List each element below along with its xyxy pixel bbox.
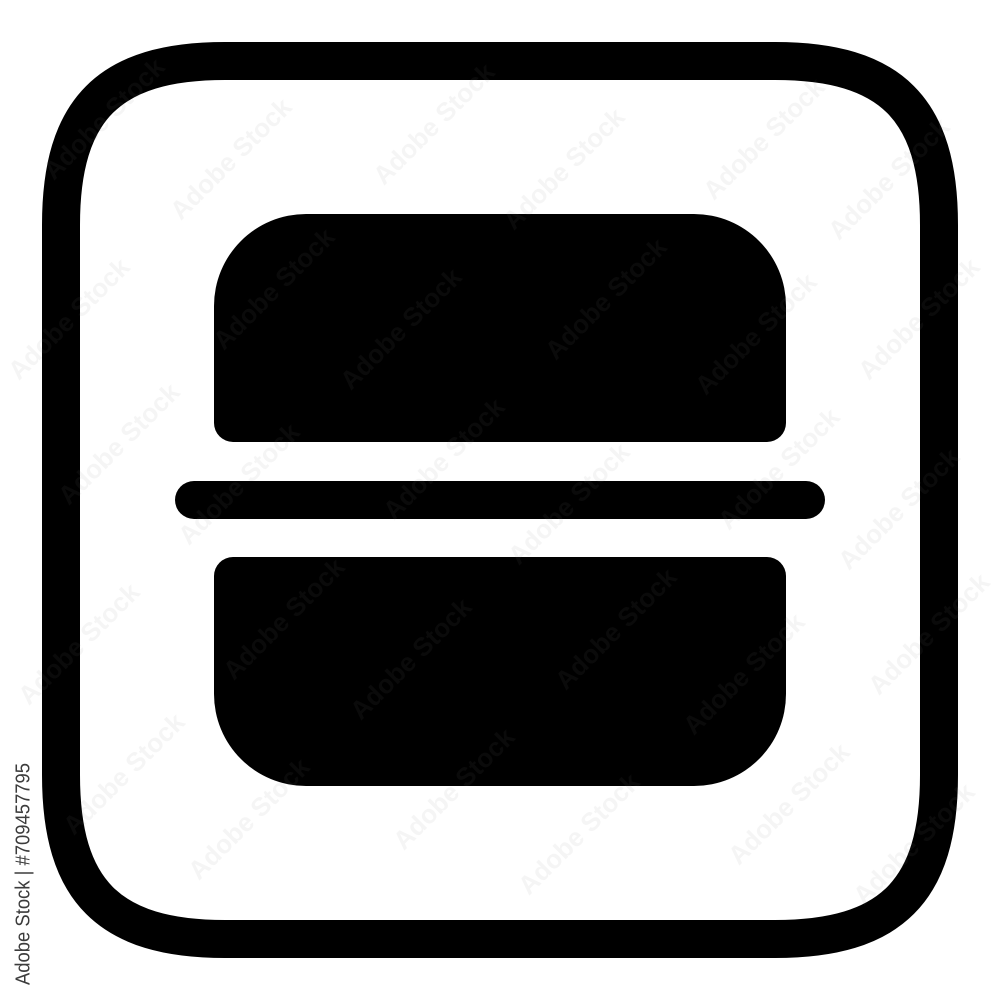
watermark pattern: Adobe Stock: [207, 221, 341, 355]
watermark pattern: Adobe Stock: [334, 261, 468, 395]
icon: bottom bun: [214, 557, 786, 786]
watermark pattern: Adobe Stock: [2, 251, 136, 385]
icon: middle patty line: [175, 481, 825, 519]
watermark pattern: Adobe Stock: [512, 766, 646, 900]
watermark pattern: Adobe Stock: [52, 376, 186, 510]
watermark pattern: Adobe Stock: [12, 576, 146, 710]
watermark pattern: Adobe Stock: [689, 266, 823, 400]
watermark pattern: Adobe Stock: [172, 416, 306, 550]
watermark pattern: Adobe Stock: [847, 776, 981, 910]
watermark pattern: Adobe Stock: [539, 231, 673, 365]
watermark pattern: Adobe Stock: [722, 736, 856, 870]
watermark pattern: Adobe Stock: [497, 101, 631, 235]
watermark pattern: Adobe Stock: [862, 566, 996, 700]
watermark pattern: Adobe Stock: [57, 706, 191, 840]
watermark pattern: Adobe Stock: [502, 436, 636, 570]
watermark pattern: Adobe Stock: [217, 551, 351, 685]
watermark pattern: Adobe Stock: [344, 591, 478, 725]
watermark pattern: Adobe Stock: [677, 606, 811, 740]
watermark pattern: Adobe Stock: [367, 56, 501, 190]
watermark pattern: Adobe Stock: [712, 401, 846, 535]
watermark pattern: Adobe Stock: [37, 51, 171, 185]
stock id caption: Adobe Stock | #709457795: [12, 763, 34, 985]
icon: rounded square frame: [61, 61, 939, 939]
watermark pattern: Adobe Stock: [697, 71, 831, 205]
watermark pattern: Adobe Stock: [832, 441, 966, 575]
watermark pattern: Adobe Stock: [164, 91, 298, 225]
watermark pattern: Adobe Stock: [377, 391, 511, 525]
icon: top bun: [214, 214, 786, 442]
watermark pattern: Adobe Stock: [182, 751, 316, 885]
watermark pattern: Adobe Stock: [387, 721, 521, 855]
watermark pattern: Adobe Stock: [852, 251, 986, 385]
watermark pattern: Adobe Stock: [822, 111, 956, 245]
watermark pattern: Adobe Stock: [549, 561, 683, 695]
